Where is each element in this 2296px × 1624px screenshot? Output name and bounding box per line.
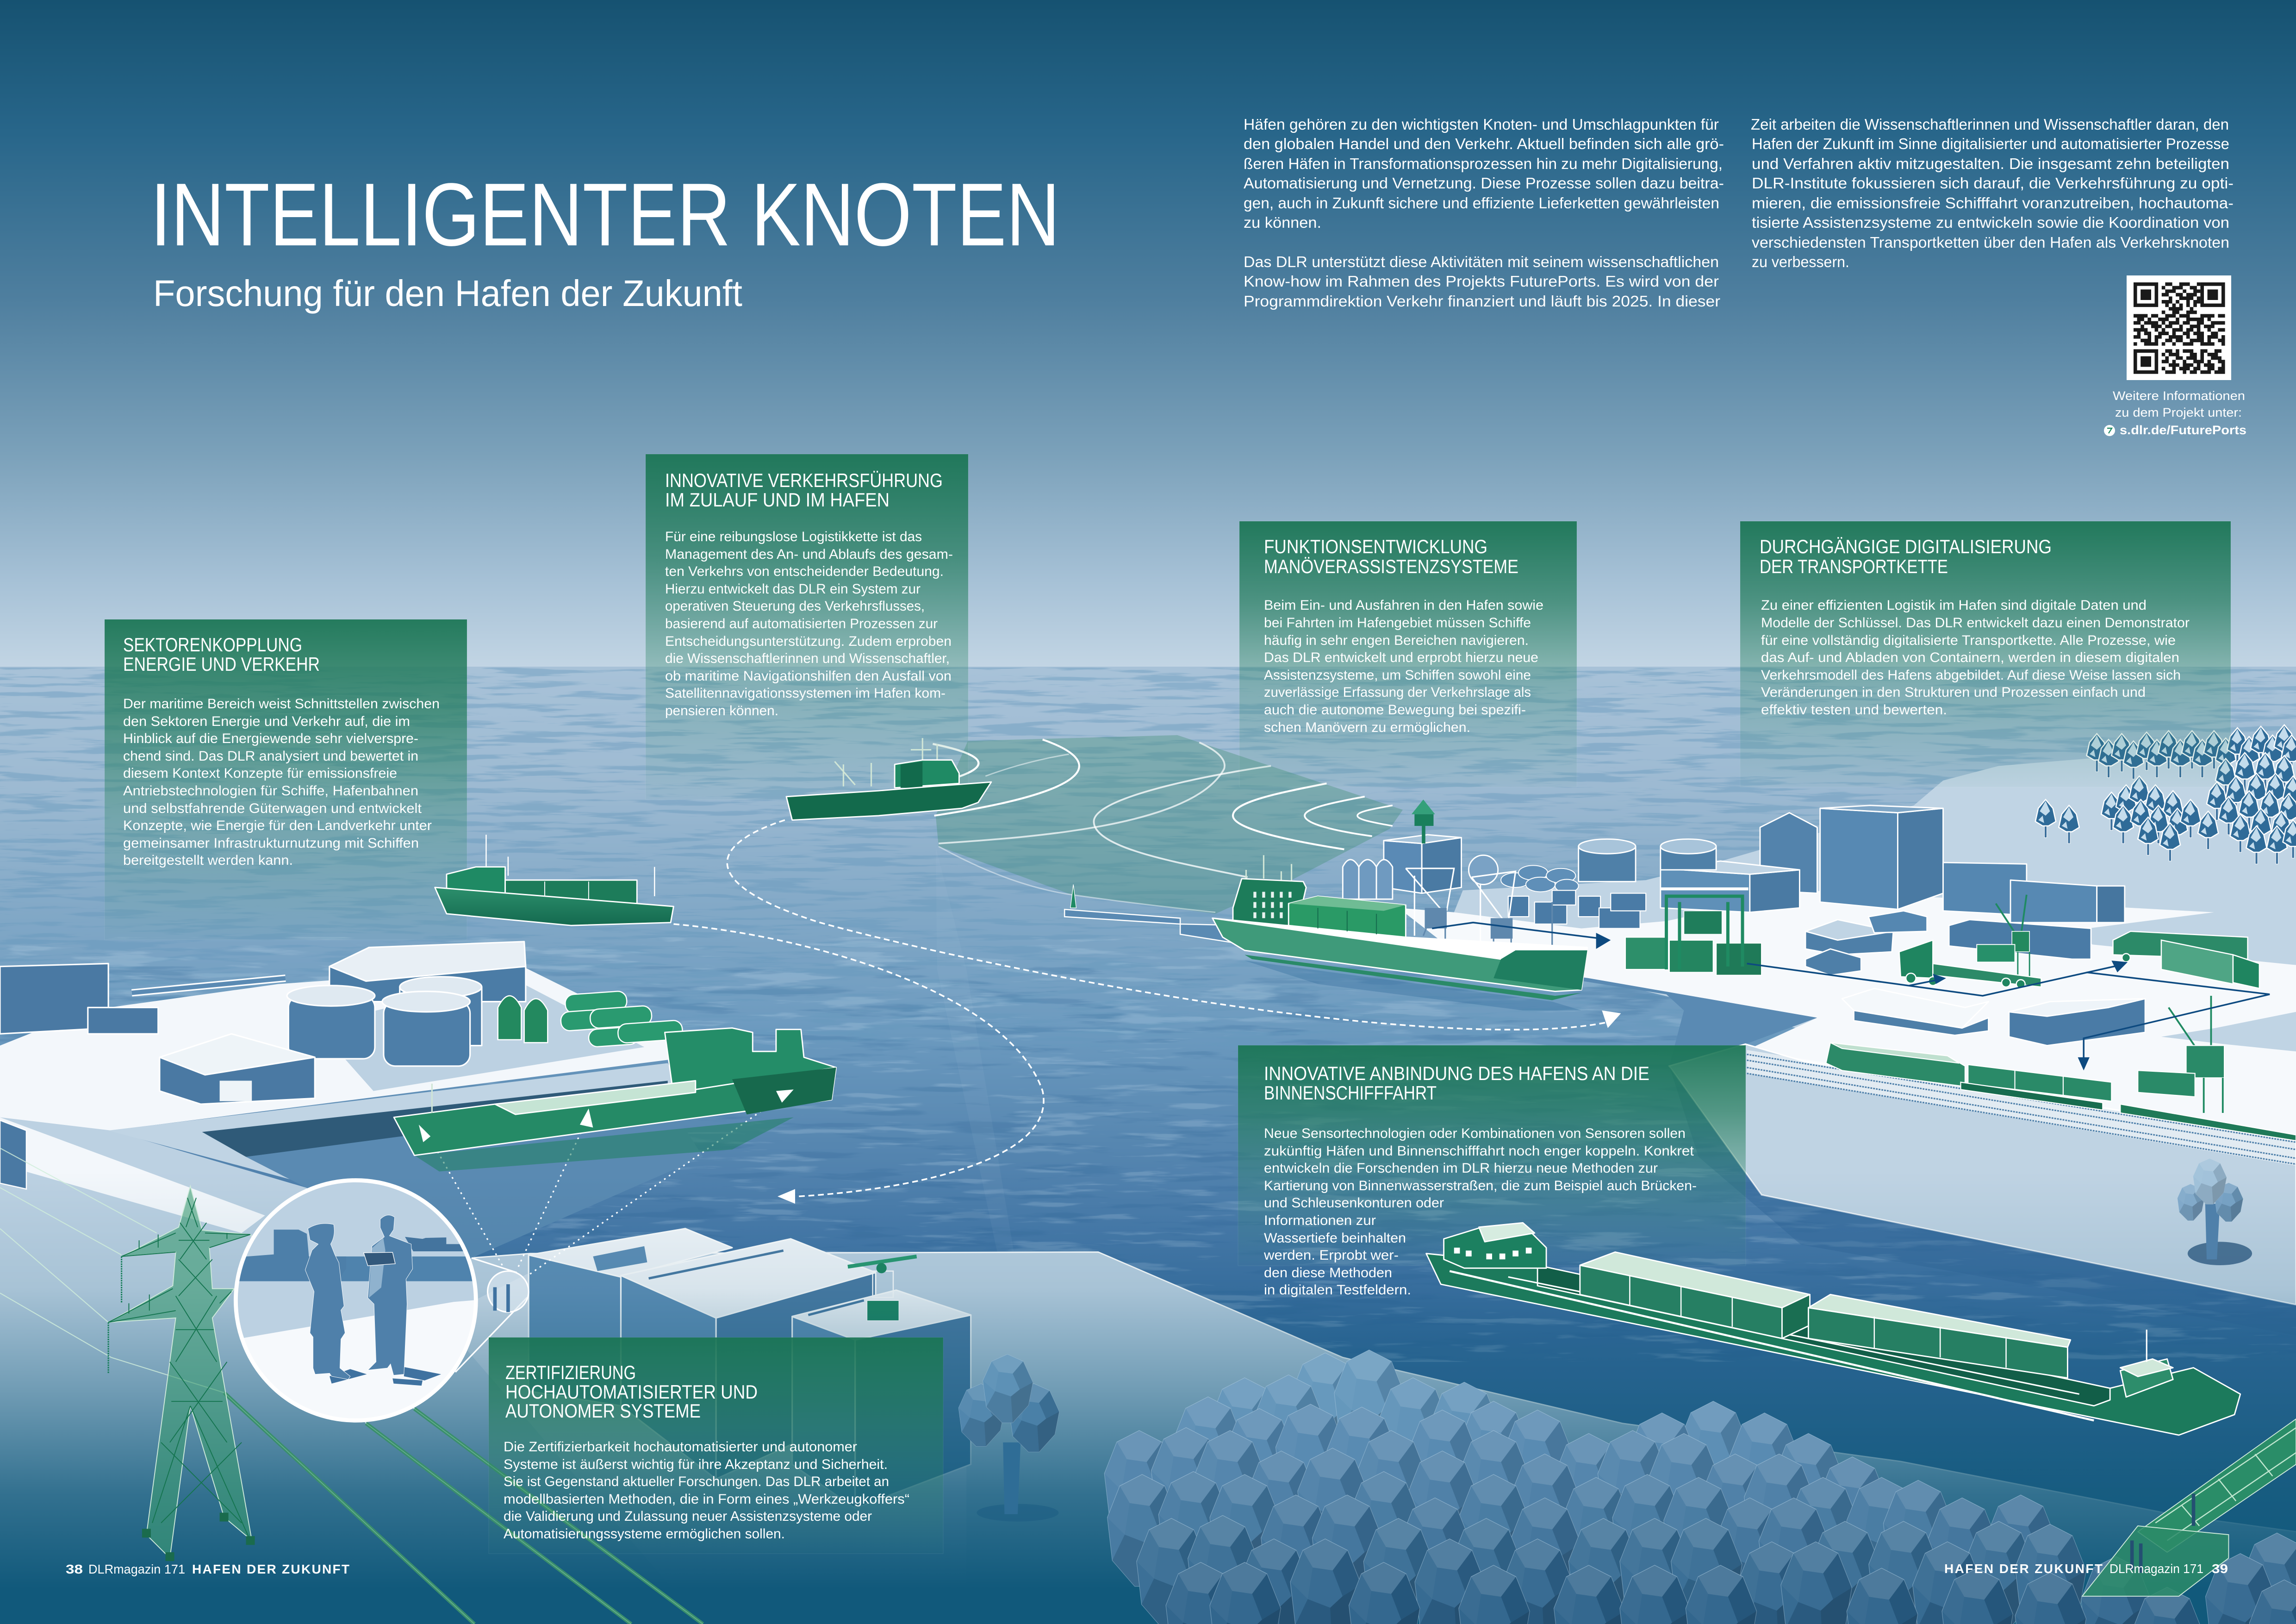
intro text column 1: gen, auch in Zukunft sichere und effiziente Lieferketten gewährleisten: [1244, 194, 1719, 212]
white quay band: [0, 1118, 265, 1233]
ships: [394, 738, 2296, 1596]
tree on embankment: [2178, 1159, 2252, 1265]
heading: INNOVATIVE VERKEHRSFÜHRUNG: [665, 469, 943, 491]
heading: HOCHAUTOMATISIERTER UND: [505, 1381, 758, 1403]
water texture: [0, 668, 2296, 1362]
harbour crane by rail: [2138, 996, 2224, 1113]
body text: Management des An- und Ablaufs des gesam-: [665, 547, 953, 562]
body text: entwickeln die Forschenden im DLR hierzu neue Methoden zur: [1264, 1161, 1658, 1176]
body text: gemeinsamer Infrastrukturnutzung mit Schiffen: [123, 836, 419, 851]
panel: Zertifizierung: [489, 1337, 943, 1554]
woman: [305, 1224, 350, 1380]
body text: effektiv testen und bewerten.: [1761, 702, 1947, 718]
body text: Neue Sensortechnologien oder Kombinationen von Sensoren sollen: [1264, 1126, 1686, 1141]
body text: auch die autonome Bewegung bei spezifi-: [1264, 702, 1526, 718]
body text: Zu einer effizienten Logistik im Hafen sind digitale Daten und: [1761, 598, 2147, 613]
ship: bulk carrier at quay: [394, 1028, 836, 1172]
intro text column 2: Hafen der Zukunft im Sinne digitalisierter und automatisierter Prozesse: [1752, 135, 2229, 152]
body text: [123, 696, 440, 868]
panel: Sektorenkopplung: [105, 619, 467, 940]
footer left: [66, 1562, 349, 1576]
land: far pale ground right: [1454, 754, 2296, 1055]
left tank farm buildings: [0, 942, 526, 1104]
dashed route: ship to quay: [673, 820, 1608, 1196]
footer left: HAFEN DER ZUKUNFT: [192, 1562, 349, 1576]
building A: [529, 1229, 732, 1406]
body text: Automatisierungssysteme ermöglichen sollen.: [504, 1526, 785, 1542]
tower building: [1384, 835, 1462, 893]
basin water: [246, 1101, 703, 1259]
heading: [1264, 536, 1518, 577]
body text: Systeme ist äußerst wichtig für ihre Akzeptanz und Sicherheit.: [504, 1457, 888, 1472]
body text: chend sind. Das DLR analysiert und bewertet in: [123, 749, 418, 764]
intro text column 2: verschiedensten Transportketten über den Hafen als Verkehrsknoten: [1752, 234, 2229, 251]
panel: Durchgängige Digitalisierung: [1740, 521, 2231, 787]
torso highlight: [369, 1238, 386, 1298]
footer right: 39: [2212, 1562, 2228, 1576]
heading: IM ZULAUF UND IM HAFEN: [665, 489, 890, 511]
quay wall shadow: [1669, 1066, 2296, 1336]
body text: Entscheidungsunterstützung. Zudem erproben: [665, 634, 952, 649]
body text: bereitgestellt werden kann.: [123, 853, 293, 868]
heading: BINNENSCHIFFFAHRT: [1264, 1082, 1437, 1104]
body text: Das DLR entwickelt und erprobt hierzu neue: [1264, 650, 1538, 665]
heading: ZERTIFIZIERUNG: [505, 1362, 636, 1383]
transmission pylon: [108, 1186, 255, 1561]
QR caption: Weitere Informationen: [2113, 389, 2245, 403]
tank farm ground: [315, 978, 644, 1091]
body text: zuverlässige Erfassung der Verkehrslage als: [1264, 685, 1531, 700]
body text: Wassertiefe beinhalten: [1264, 1230, 1406, 1246]
body text: operativen Steuerung des Verkehrsflusses,: [665, 599, 925, 614]
shadows: [330, 1367, 441, 1386]
body text: [504, 1439, 909, 1542]
left land edge lines: [472, 1252, 2296, 1532]
sea: [0, 667, 2296, 1624]
harbour scene illustration: [0, 668, 2296, 1624]
green containers and gantry: [1625, 889, 1761, 975]
body text: Hierzu entwickelt das DLR ein System zur: [665, 581, 921, 597]
sphere tank: [1468, 855, 1498, 885]
body text: die Wissenschaftlerinnen und Wissenschaftler,: [665, 651, 950, 666]
quay lighter ground: [439, 1274, 966, 1624]
intro text column 1: Automatisierung und Vernetzung. Diese Prozesse sollen dazu beitra-: [1244, 175, 1724, 192]
body text: pensieren können.: [665, 703, 778, 718]
truck two: [2113, 931, 2259, 988]
body text: und selbstfahrende Güterwagen und entwickelt: [123, 801, 422, 816]
footer left: 38: [66, 1562, 83, 1576]
body text: basierend auf automatisierten Prozessen zur: [665, 616, 938, 631]
blue container stacks near silos: [1508, 890, 1646, 928]
body text: Assistenzsysteme, um Schiffen sowohl eine: [1264, 668, 1531, 683]
dotted sightlines to ship: [430, 1095, 784, 1274]
heading: [1264, 1062, 1649, 1104]
intro text column 1: [1244, 116, 1724, 310]
body text: [665, 529, 953, 718]
left land pale: [0, 1084, 2296, 1624]
body text: diesem Kontext Konzepte für emissionsfreie: [123, 766, 397, 781]
bottom fade over land: [0, 1172, 2296, 1624]
body text: [1264, 598, 1543, 735]
left small building at edge: [0, 1120, 26, 1189]
body text: die Validierung und Zulassung neuer Assistenzsysteme oder: [504, 1509, 872, 1524]
heading: [665, 469, 943, 511]
building C: [792, 1290, 971, 1508]
heading: INNOVATIVE ANBINDUNG DES HAFENS AN DIE: [1264, 1062, 1649, 1084]
panel: Innovative Anbindung: [1238, 1045, 1746, 1298]
heading: FUNKTIONSENTWICKLUNG: [1264, 536, 1487, 557]
warehouses: [1805, 911, 1989, 1035]
body text: modellbasierten Methoden, die in Form eines „Werkzeugkoffers“: [504, 1492, 909, 1507]
lower centre buildings: [529, 1229, 971, 1508]
QR caption: s.dlr.de/FuturePorts: [2120, 423, 2246, 437]
body text: [1761, 598, 2190, 718]
train: [1826, 1043, 2296, 1141]
back warehouse: [330, 942, 526, 1002]
body text: Für eine reibungslose Logistikkette ist das: [665, 529, 922, 544]
ship: inland barge: [1426, 1223, 2240, 1435]
ship reflection under tanker: [1244, 961, 1581, 1011]
radar mast: [848, 1256, 917, 1321]
body text: in digitalen Testfeldern.: [1264, 1282, 1411, 1298]
footer right: [1944, 1562, 2228, 1576]
footer right: DLRmagazin 171: [2109, 1562, 2203, 1576]
intro text column 1: Know-how im Rahmen des Projekts FuturePorts. Es wird von der: [1244, 273, 1719, 290]
tablet: [364, 1252, 395, 1266]
heading: [123, 634, 320, 675]
mid buildings: [1661, 861, 2125, 923]
intro text column 2: zu verbessern.: [1752, 253, 1849, 270]
radar sector: ship to harbour: [928, 735, 1403, 1624]
body text: Kartierung von Binnenwasserstraßen, die zum Beispiel auch Brücken-: [1264, 1178, 1697, 1193]
body text: Veränderungen in den Strukturen und Prozessen einfach und: [1761, 685, 2146, 700]
tower beacon: [1412, 800, 1435, 843]
body text: bei Fahrten im Hafengebiet müssen Schiffe: [1264, 615, 1531, 631]
breakwater with light: [1064, 885, 1244, 944]
tree beside building: [958, 1354, 1059, 1522]
horizontal tanks: [1501, 865, 1579, 893]
heading: AUTONOMER SYSTEME: [505, 1400, 701, 1422]
ship: tanker at terminal: [1213, 855, 1587, 1000]
QR caption: [2104, 389, 2246, 437]
dock pale apron: [108, 1063, 678, 1183]
intro text column 1: Programmdirektion Verkehr finanziert und läuft bis 2025. In dieser: [1244, 293, 1720, 310]
body text: Der maritime Bereich weist Schnittstellen zwischen: [123, 696, 440, 712]
green tanks left: [498, 991, 683, 1047]
harbour backdrop: [235, 1230, 479, 1426]
terminal white ground: [1399, 890, 2296, 1138]
left land white: [0, 967, 688, 1131]
rail tracks: [1747, 1050, 2296, 1166]
tall rear buildings: [1760, 806, 1943, 909]
intro text column 2: DLR-Institute fokussieren sich darauf, die Verkehrsführung zu opti-: [1752, 175, 2234, 192]
body text: Sie ist Gegenstand aktueller Forschungen. Das DLR arbeitet an: [504, 1474, 889, 1489]
body text: den diese Methoden: [1264, 1265, 1392, 1280]
intro text column 1: Das DLR unterstützt diese Aktivitäten mit seinem wissenschaftlichen: [1244, 253, 1719, 270]
intro text column 2: tisierte Assistenzsysteme zu entwickeln sowie die Koordination von: [1752, 214, 2229, 231]
title: INTELLIGENTER KNOTEN: [150, 164, 1060, 264]
rail embankment ground: [1669, 1044, 2296, 1305]
heading: ENERGIE UND VERKEHR: [123, 653, 320, 675]
small pipework: [88, 978, 286, 1034]
truck one: [1899, 940, 2041, 988]
body text: ob maritime Navigationshilfen den Ausfall von: [665, 668, 952, 684]
terminal crane with container: [1977, 895, 2029, 977]
route arrowheads: [778, 1011, 1621, 1204]
panel: Funktionsentwicklung: [1239, 521, 1577, 787]
body text: den Sektoren Energie und Verkehr auf, die im: [123, 714, 410, 729]
QR caption: zu dem Projekt unter:: [2115, 406, 2242, 419]
intro text column 2: und Verfahren aktiv mitzugestalten. Die insgesamt zehn beteiligten: [1752, 155, 2229, 172]
capsule tanks: [1343, 860, 1393, 899]
ship: freighter centre: [786, 738, 991, 820]
body text: Verkehrsmodell des Hafens abgebildet. Auf diese Weise lassen sich: [1761, 668, 2181, 683]
body text: häufig in sehr engen Bereichen navigieren.: [1264, 633, 1529, 648]
blue container blocks right: [1949, 919, 2145, 1046]
body text: zukünftig Häfen und Binnenschifffahrt noch enger koppeln. Konkret: [1264, 1143, 1694, 1159]
intro text column 2: [1751, 116, 2234, 270]
body text: Satellitennavigationssystemen im Hafen kom-: [665, 686, 946, 701]
power lines: [0, 1148, 703, 1624]
body text: [1263, 1126, 1697, 1298]
logistic route arrows: [1432, 923, 2270, 1070]
heading: DER TRANSPORTKETTE: [1760, 556, 1948, 577]
body text: Konzepte, wie Energie für den Landverkehr unter: [123, 818, 432, 833]
intro text column 2: Zeit arbeiten die Wissenschaftlerinnen und Wissenschaftler daran, den: [1751, 116, 2229, 133]
body text: Die Zertifizierbarkeit hochautomatisierter und autonomer: [504, 1439, 857, 1455]
heading: [1760, 536, 2052, 577]
intro text column 1: zu können.: [1244, 214, 1321, 231]
panel: Innovative Verkehrsführung: [646, 454, 968, 800]
body text: für eine vollständig digitalisierte Transportkette. Alle Prozesse, wie: [1761, 633, 2176, 648]
body text: Modelle der Schlüssel. Das DLR entwickelt dazu einen Demonstrator: [1761, 615, 2190, 631]
terminal buildings: [1343, 806, 2145, 1046]
footer left: DLRmagazin 171: [88, 1562, 185, 1576]
footer right: HAFEN DER ZUKUNFT: [1944, 1562, 2103, 1576]
large tanks: [287, 977, 482, 1066]
body text: ten Verkehrs von entscheidender Bedeutung.: [665, 564, 944, 579]
ship: cargo vessel top left: [435, 835, 673, 925]
man: [368, 1215, 413, 1375]
heading: [505, 1362, 758, 1422]
subtitle: Forschung für den Hafen der Zukunft: [153, 273, 742, 314]
body text: schen Manövern zu ermöglichen.: [1264, 720, 1470, 735]
intro text column 1: Häfen gehören zu den wichtigsten Knoten- und Umschlagpunkten für: [1244, 116, 1719, 133]
cranes on terminal: [1406, 868, 1552, 952]
small trees far right: [2035, 725, 2296, 864]
heading: SEKTORENKOPPLUNG: [123, 634, 302, 656]
left box building: [0, 963, 108, 1034]
body text: Antriebstechnologien für Schiffe, Hafenbahnen: [123, 783, 418, 799]
body text: das Auf- und Abladen von Containern, werden in diesem digitalen: [1761, 650, 2179, 665]
body text: Hinblick auf die Energiewende sehr vielverspre-: [123, 731, 418, 746]
body text: werden. Erprobt wer-: [1263, 1248, 1399, 1263]
heading: DURCHGÄNGIGE DIGITALISIERUNG: [1760, 536, 2052, 557]
dock basin dark: [202, 1081, 668, 1157]
body text: Beim Ein- und Ausfahren in den Hafen sowie: [1264, 598, 1543, 613]
intro text column 1: den globalen Handel und den Verkehr. Aktuell befinden sich alle grö-: [1244, 135, 1724, 152]
intro text column 1: ßeren Häfen in Transformationsprozessen hin zu mehr Digitalisierung,: [1244, 155, 1723, 172]
zoom circle with researchers: [235, 1181, 479, 1426]
link icon: [2104, 425, 2115, 436]
body text: Informationen zur: [1264, 1213, 1376, 1228]
large silos: [1579, 839, 1716, 881]
footbridge bottom right: [2082, 1419, 2296, 1596]
sky background: [0, 0, 2296, 667]
body text: und Schleusenkonturen oder: [1264, 1195, 1444, 1211]
intro text column 2: mieren, die emissionsfreie Schifffahrt voranzutreiben, hochautoma-: [1752, 194, 2234, 212]
terminal quay side: [1583, 965, 1817, 1066]
heading: MANÖVERASSISTENZSYSTEME: [1264, 556, 1518, 577]
front house: [160, 1034, 315, 1104]
forest: [1104, 1350, 2296, 1624]
small figures circle and connecting lines: [455, 1258, 529, 1372]
QR code: [2127, 275, 2231, 380]
building B: [621, 1239, 876, 1479]
